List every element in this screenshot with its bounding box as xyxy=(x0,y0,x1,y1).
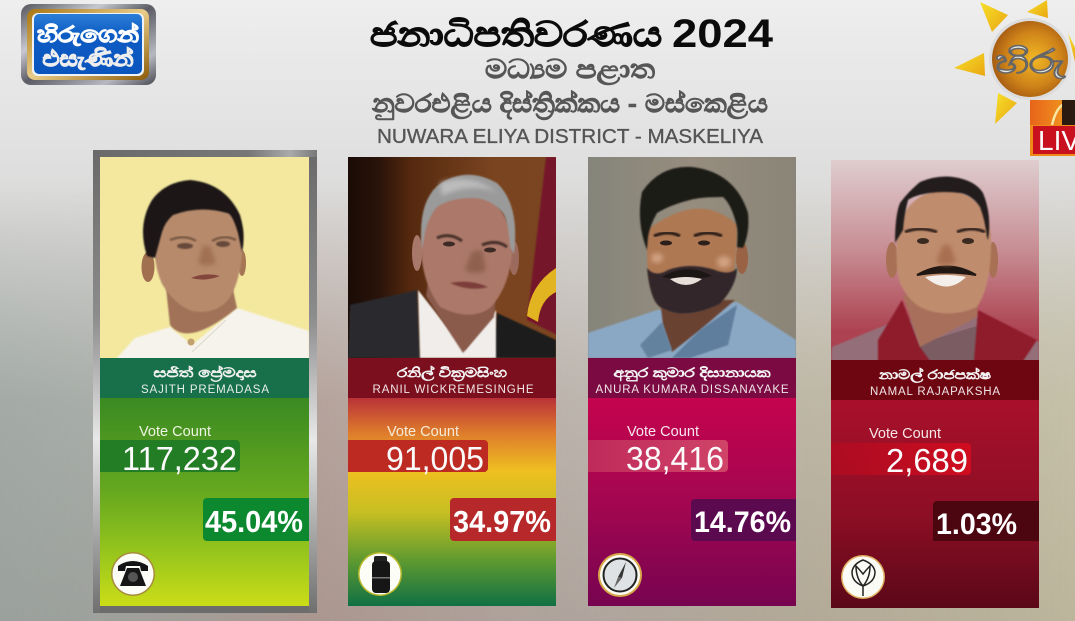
vote count: 91,005 xyxy=(386,440,484,477)
body xyxy=(100,398,309,606)
name band: RANIL WICKREMESINGHE xyxy=(372,384,534,396)
name band: රනිල් වික්‍රමසිංහ xyxy=(397,364,507,382)
logo: Hiru TV sun xyxy=(954,0,1075,156)
logo: Hiru news badge xyxy=(21,4,156,85)
vote count xyxy=(831,426,971,479)
name band: අනුර කුමාර දිසානායක xyxy=(614,365,771,382)
name band xyxy=(831,360,1039,400)
panel: Sajith Premadasa xyxy=(93,150,317,613)
name band: NAMAL RAJAPAKSHA xyxy=(870,386,1000,398)
vote count xyxy=(100,424,240,477)
subtitle: district English: NUWARA ELIYA DISTRICT - MASKELIYA xyxy=(377,126,764,148)
icon: gas cylinder xyxy=(358,552,402,596)
name band: නාමල් රාජපක්ෂ xyxy=(878,366,991,384)
panel: Namal Rajapaksha xyxy=(831,160,1039,608)
percentage: 34.97% xyxy=(453,504,551,539)
percentage: 1.03% xyxy=(936,508,1017,541)
vote count: Vote Count xyxy=(869,426,941,442)
vote count: 2,689 xyxy=(886,442,968,479)
name band: SAJITH PREMADASA xyxy=(141,384,269,396)
panel: Anura Kumara Dissanayake xyxy=(588,157,796,606)
portrait xyxy=(588,157,796,358)
body xyxy=(348,398,556,606)
portrait xyxy=(348,157,557,358)
title xyxy=(370,12,774,56)
icon: lotus bud xyxy=(841,555,885,599)
subtitle: district Sinhala: නුවරඑළිය දිස්ත්‍රික්කය - මස්කෙළිය xyxy=(371,89,768,121)
title: ජනාධිපතිවරණය xyxy=(370,16,662,54)
percentage xyxy=(933,501,1039,541)
percentage: 14.76% xyxy=(694,506,791,539)
name band xyxy=(100,358,309,398)
vote count: 38,416 xyxy=(626,440,724,477)
panel: Ranil Wickremesinghe xyxy=(348,157,557,606)
percentage: 45.04% xyxy=(205,504,303,539)
portrait xyxy=(100,157,309,360)
logo: Hiru TV sun: හිරු xyxy=(995,43,1067,80)
name band: ANURA KUMARA DISSANAYAKE xyxy=(596,384,789,396)
highlight frame xyxy=(93,150,317,613)
vote count: Vote Count xyxy=(139,424,211,440)
name band xyxy=(588,358,796,398)
name band: සජිත් ප්‍රේමදාස xyxy=(154,364,257,382)
logo: Hiru news badge: එසැණින් xyxy=(42,46,134,71)
body xyxy=(831,400,1039,608)
subtitle: province: මධ්‍යම පළාත xyxy=(485,54,655,86)
body xyxy=(588,398,796,606)
icon: compass xyxy=(598,553,642,597)
name band xyxy=(348,358,556,398)
title: 2024 xyxy=(672,12,774,56)
icon: telephone xyxy=(111,552,155,596)
vote count xyxy=(348,424,488,477)
vote count: Vote Count xyxy=(387,424,459,440)
vote count: Vote Count xyxy=(627,424,699,440)
logo: Hiru news badge: හිරුගෙන් xyxy=(37,22,139,47)
vote count: 117,232 xyxy=(122,440,237,477)
portrait xyxy=(831,160,1039,361)
vote count xyxy=(588,424,728,477)
